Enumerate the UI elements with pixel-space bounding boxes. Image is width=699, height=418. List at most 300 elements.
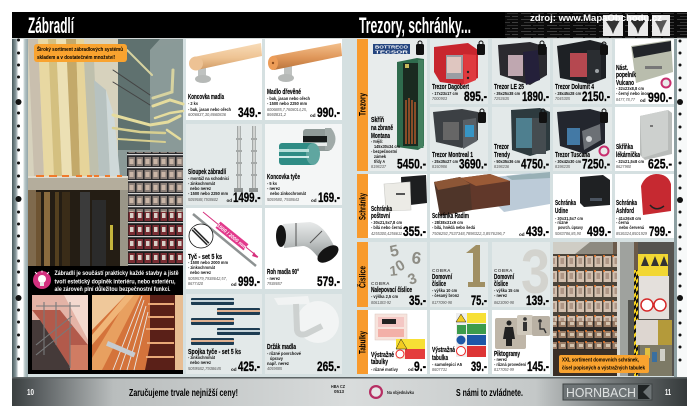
product details: - zinkochromát	[188, 181, 215, 186]
product details	[188, 260, 228, 286]
price: od	[640, 98, 646, 103]
price: od	[311, 198, 317, 203]
product title: Výstražné	[371, 352, 394, 359]
product image: steel numeral 3: 3	[521, 238, 550, 307]
product details: - 5 ks	[267, 181, 277, 186]
product image: stick-on numerals: 3	[406, 270, 419, 289]
product title: Skříňka	[616, 144, 633, 151]
product card: Skříňka lékárnička	[615, 107, 674, 172]
product details: 4059885	[267, 366, 282, 371]
product title: Vulcano	[616, 80, 634, 87]
product card: Držák madla	[265, 294, 342, 374]
product details: - 41x26x8 cm	[616, 216, 641, 221]
product details: - 1500 nebo 2250 mm	[267, 101, 307, 106]
product details: 8627980	[616, 164, 631, 169]
callout: wide range of railing systems	[34, 44, 127, 62]
price: od	[310, 113, 316, 118]
product image: stick-on numerals	[388, 242, 422, 289]
product title: Trezor Dolumit 4	[555, 84, 594, 91]
product card: Nástěnný popelník Vulcano	[615, 39, 674, 105]
price: 169.-	[318, 190, 340, 205]
product details: - černý nebo inox	[616, 91, 649, 96]
section tab: Tabulky: Tabulky	[358, 331, 368, 354]
product details: 5059588,7938602	[188, 197, 218, 202]
product title: Koncovka tyče	[267, 174, 300, 181]
product details: 7045305	[555, 96, 570, 101]
right page header bar	[350, 12, 687, 39]
price: od	[231, 282, 237, 287]
product details: 7000903	[432, 96, 447, 101]
product image: white and black mailboxes	[384, 175, 427, 211]
product card: Trezor Dagobert	[430, 39, 488, 104]
product title: Výstražná	[432, 347, 455, 354]
product image: rod end caps	[279, 128, 336, 165]
product image: first aid cabinet	[640, 110, 672, 160]
icon: weight tag	[600, 42, 608, 55]
product details: - bílá nebo černá	[371, 225, 402, 230]
right footer	[350, 377, 687, 406]
product details: - výška 15 cm	[494, 288, 519, 293]
product details	[188, 355, 222, 371]
brand logo: BOTTRECO	[375, 44, 409, 50]
product title: Montana	[371, 133, 390, 140]
info text: tvoří estetický doplněk interiéru, nebo exteriéru,	[54, 278, 176, 286]
product details	[267, 96, 310, 117]
issue code	[331, 384, 345, 394]
product title	[616, 144, 640, 159]
product title	[616, 200, 637, 215]
panel: black info box with photos	[28, 266, 183, 374]
product image: stick-on numerals: 5	[388, 242, 401, 261]
price: 425.-	[238, 359, 260, 374]
product title: Piktogramy	[494, 351, 520, 358]
price	[231, 359, 260, 374]
product details: - buk, jasan nebo ořech	[267, 96, 310, 101]
info text: Zábradlí je součástí prakticky každé stavby a jistě	[54, 270, 179, 277]
product details	[494, 91, 520, 101]
brand logo: TECSOR	[375, 50, 409, 54]
icon: weight tag	[478, 109, 486, 123]
product title: Domovní	[494, 274, 515, 281]
product details: nebo zinkochromát	[270, 191, 306, 196]
product card: Nalepovací číslice	[368, 242, 427, 308]
product details	[267, 181, 306, 202]
product title: Nást.	[616, 65, 628, 72]
price: 3690.-	[459, 156, 487, 172]
product card: Trezor Trendy	[492, 107, 550, 172]
icon: weight tag	[416, 41, 424, 55]
product image: safety sign sheet	[456, 313, 486, 357]
icon: light bulb	[33, 270, 51, 289]
product image: navy safe	[557, 109, 605, 154]
product details: - 32x21,5x8 cm	[616, 159, 644, 164]
price: 39.-	[471, 359, 487, 374]
product details	[432, 362, 462, 372]
product details: nebo červená	[619, 225, 644, 230]
product details: zámek	[374, 154, 386, 159]
product image: rod with length tag: 1500 / 2000 mm	[215, 223, 248, 251]
price: 999.-	[238, 274, 260, 289]
photo: house numbers and signs store display	[553, 242, 674, 376]
slogan: with us you can do it: S námi to zvládnete.	[456, 387, 523, 399]
price: 139.-	[526, 293, 549, 308]
product title: Trendy	[494, 152, 510, 159]
product image: grey safe	[433, 109, 478, 149]
product title: Schránka	[371, 206, 392, 213]
product details: - 28/38x31x9 cm	[432, 220, 463, 225]
right binder strip	[674, 39, 687, 377]
fittings rack	[127, 152, 183, 212]
icon: weight tag	[477, 41, 485, 55]
callout: wide range of railing systems: Široký sortiment zábradlových systémů	[37, 45, 123, 53]
product details: - 17x23x17 cm	[432, 91, 458, 96]
product card: Výstražná tabulka	[430, 310, 488, 374]
product title: Madlo dřevěné	[267, 89, 301, 96]
product details: - 35x25x38 cm	[494, 91, 520, 96]
page number 11: 11	[665, 388, 671, 397]
product card: Koncovka tyče	[265, 124, 342, 205]
product details	[494, 288, 519, 305]
price: 75.-	[471, 293, 487, 308]
product card: Domovní číslice nerez	[492, 238, 550, 308]
product title: Držák madla	[267, 344, 296, 351]
product title: Tyč - set 5 ks	[188, 254, 222, 261]
product details: 5059580, 7938643	[267, 197, 299, 202]
product details: - 25x35x27 cm	[432, 159, 458, 164]
product details: 4255300,4256611	[371, 231, 402, 236]
product details: 5059582,7938645	[188, 366, 222, 371]
product title: Schránka	[616, 200, 637, 207]
product title: tabulka	[432, 355, 448, 362]
price: 579.-	[317, 274, 340, 289]
product details: - buk, jasan nebo ořech	[188, 107, 231, 112]
product details: - zinkochromát	[188, 265, 215, 270]
product image: railing posts	[234, 126, 258, 192]
product details: - 1500 nebo 2000 mm	[188, 260, 228, 265]
product image: dark teal safe	[511, 108, 550, 156]
product card: Skříň na zbraně Montana	[368, 39, 427, 172]
product details: - nerez	[494, 293, 508, 298]
product details: - 28x45x28 cm	[555, 91, 581, 96]
product details	[616, 86, 649, 102]
product details: - nerez	[267, 186, 281, 191]
product details: - černá	[616, 220, 629, 225]
product details: - bezpečnostní	[371, 149, 398, 154]
product details: - montáž na schodnici	[188, 176, 229, 181]
product details: 7506292,7537348,7898322,3,8576196,7	[432, 231, 506, 236]
product image: dark safe	[498, 42, 547, 85]
product image: stick-on numerals: 0	[392, 257, 408, 275]
price	[640, 90, 672, 105]
product card: Roh madla 90°	[265, 208, 342, 289]
price	[231, 274, 260, 289]
product details: 145x30x34 cm	[374, 144, 400, 149]
issue code: HBA CZ	[331, 384, 345, 389]
product title	[494, 274, 515, 288]
product details: nebo nerez	[190, 360, 212, 365]
product image: wall ashtray	[631, 40, 673, 83]
product details: třídy A	[374, 159, 386, 164]
product details: - různé povrchové	[267, 350, 301, 356]
product details: 5059579,7938642,57,	[188, 276, 227, 281]
product title	[371, 352, 394, 366]
product card: Spojka tyče	[186, 294, 262, 374]
product details: 8177092-99	[494, 367, 514, 372]
brand: Cobra: COBRA	[494, 268, 513, 273]
product details: 8177090-98	[432, 300, 452, 305]
section tab: Číslice	[356, 242, 368, 307]
product details: 8198237	[371, 164, 386, 169]
product details: 8623090-98	[494, 300, 514, 305]
product title: lékárnička	[616, 152, 640, 159]
product title: Schránka	[555, 200, 576, 207]
product card: Koncovka madla	[186, 39, 262, 120]
product title	[432, 274, 453, 288]
price: 499.-	[587, 224, 611, 239]
product title	[494, 144, 510, 159]
product details	[555, 216, 583, 236]
product title: Schránka Radim	[432, 213, 469, 220]
product details: 7938657	[267, 281, 282, 286]
product details: 8198235	[555, 164, 570, 169]
product details: - 30x31,5x7 cm	[555, 216, 583, 221]
product details: - 30x42x30 cm	[555, 159, 581, 164]
product details: 6006885,7,7608014,25,	[267, 107, 307, 112]
price tags on shelf	[36, 175, 122, 177]
product details: 6006837,30,8660836	[188, 112, 227, 117]
price: 5450.-	[397, 156, 426, 172]
price: 895.-	[464, 89, 487, 104]
product title	[432, 347, 455, 362]
product card: Trezor Tuscana	[553, 107, 612, 172]
slogan: lowest prices: Zaručujeme trvale nejnižší ceny!	[129, 387, 238, 399]
product title: Trezor	[494, 144, 509, 151]
product title: poštovní	[371, 213, 391, 220]
product card: Madlo dřevěné	[265, 39, 342, 120]
callout: XXL assortment: čísel popisných a výstražných tabulek	[562, 366, 645, 372]
price: 1890.-	[522, 89, 549, 104]
photo: wooden staircase with handrail	[92, 295, 183, 370]
section tab: Tabulky	[357, 310, 368, 374]
product image: wooden handrail end	[189, 43, 262, 83]
product card: Piktogramy	[492, 310, 550, 374]
icon: weight tag	[600, 109, 608, 123]
section tab: Schránky	[357, 174, 368, 238]
price: od	[519, 232, 525, 237]
product image: red safe	[434, 43, 478, 85]
product details	[494, 357, 527, 372]
product details: - 1500 nebo 2250 mm	[188, 191, 228, 196]
product details	[267, 350, 301, 371]
product card: Schránka Radim	[430, 172, 550, 239]
left page header bar	[12, 12, 350, 39]
product image: black mailbox	[580, 175, 610, 207]
product title: Sloupek zábradlí	[188, 169, 227, 176]
price: 9.-	[414, 359, 426, 374]
product details: - 30x21,5x7,8 cm	[371, 220, 402, 225]
price: 7250.-	[582, 156, 610, 172]
product details: 8677420	[188, 281, 203, 286]
product title: Trezor Dagobert	[432, 84, 469, 91]
product details: - různé motivy	[371, 366, 398, 372]
page number 10: 10	[27, 388, 34, 397]
product details: - různé	[555, 219, 568, 225]
product title: Udine	[555, 208, 568, 215]
section tab: Trezory: Trezory	[358, 93, 368, 116]
product card: Trezor Dolumit 4	[553, 39, 612, 104]
price: od	[408, 367, 414, 372]
section tab: Schránky: Schránky	[358, 193, 368, 220]
product details	[432, 288, 460, 305]
icon: weight tag	[539, 109, 547, 123]
product details: - bílá, hnědá nebo šedá	[432, 225, 475, 230]
price: 799.-	[649, 224, 671, 239]
product details	[188, 176, 229, 202]
icon: clock on-order badge	[660, 78, 672, 88]
price	[519, 224, 549, 239]
price: 625.-	[648, 156, 672, 172]
lower shelf unit	[28, 176, 128, 190]
product details: - výška 2,5 cm	[371, 294, 398, 299]
issue code: 0513	[334, 389, 344, 394]
price	[310, 105, 340, 120]
product title: Ashford	[616, 208, 634, 215]
source watermark: zdroj: www.MapaObchodu.cz	[530, 13, 662, 24]
callout: wide range of railing systems: skladem a v dostatečném množství!	[37, 55, 115, 61]
price: 265.-	[317, 359, 340, 374]
brand logo	[373, 44, 410, 54]
product title: na zbraně	[371, 125, 393, 132]
price: od	[226, 198, 232, 203]
product image: stick-on numerals: 6	[410, 248, 422, 268]
product details: např. nerez	[267, 361, 290, 366]
price: 2150.-	[582, 89, 610, 104]
section tab: Číslice: Číslice	[356, 266, 368, 288]
price: 990.-	[648, 90, 672, 105]
product details: 8198236	[494, 164, 509, 169]
product title: Skříň	[371, 117, 384, 124]
product card: Schránka Ashford	[615, 174, 674, 239]
product title: tabulky	[371, 359, 388, 366]
product title: Trezor Montreal 1	[432, 152, 473, 159]
product title: číslice	[494, 281, 508, 288]
price: 990.-	[317, 105, 340, 120]
heading: Zábradlí: Zábradlí	[28, 13, 74, 38]
product image: black wall safe	[557, 40, 606, 84]
thumbnails in header	[603, 15, 670, 36]
icon: weight tag	[538, 41, 546, 55]
price: 145.-	[527, 359, 549, 374]
note: on order: Na objednávku	[387, 390, 414, 395]
product title: Trezor LE 25	[494, 84, 524, 91]
product details: - Vnější:	[371, 139, 383, 144]
product card: Domovní číslice bronz	[430, 242, 488, 308]
product details: povrch. úpravy	[558, 225, 583, 230]
product details	[432, 159, 458, 169]
product details: - výška 10 cm	[432, 288, 457, 293]
product details: - samolepicí A5	[432, 362, 462, 367]
product details: 8150986	[432, 164, 447, 169]
product details: - česaný bronz	[432, 293, 460, 298]
product title: Domovní	[432, 274, 453, 281]
product title: Roh madla 90°	[267, 268, 299, 276]
product details	[494, 159, 520, 169]
product details: 8061383-92	[371, 300, 391, 305]
product details: úpravy	[270, 356, 283, 361]
product details	[616, 216, 647, 236]
product card: Trezor LE 25	[492, 39, 550, 104]
product details: - 50x35x36 cm	[494, 159, 520, 164]
price: 349.-	[238, 105, 261, 120]
product image: stick-on numerals: 1	[389, 262, 398, 279]
product card: Tyč set 5 ks	[186, 208, 262, 289]
section tab: Trezory	[357, 39, 368, 171]
wall-mounted handrail samples	[113, 50, 183, 142]
product details: - 32x23x8,8 cm	[616, 86, 644, 91]
product details	[371, 139, 400, 169]
product details	[371, 294, 398, 305]
product image: pictogram tiles	[495, 315, 550, 349]
product title: Spojka tyče - set 5 ks	[188, 349, 241, 356]
product image: red mailbox	[641, 174, 671, 215]
product title: popelník	[616, 72, 636, 79]
product card: Schránka Udine	[553, 174, 612, 239]
product image: green gun cabinet	[397, 58, 424, 150]
product card: Výstražné tabulky	[368, 310, 427, 374]
product title: Trezor Tuscana	[555, 152, 590, 159]
product details: 8477,78,77	[616, 97, 635, 102]
product card: Trezor Montreal 1	[430, 107, 488, 172]
product image: elbow joint	[276, 222, 342, 266]
price: od	[231, 367, 237, 372]
info text: ale zároveň plní důležitou bezpečnostní funkci.	[54, 286, 171, 293]
price: 4750.-	[521, 156, 549, 172]
left footer	[12, 377, 350, 406]
photo: steel railing staircase	[32, 295, 88, 370]
price: 35.-	[409, 293, 426, 308]
product title	[371, 117, 393, 140]
price	[311, 190, 340, 205]
price	[226, 190, 260, 205]
info text	[54, 270, 179, 293]
product details	[267, 276, 282, 286]
product image: brown and blue mailboxes	[434, 172, 550, 216]
logo: Hornbach: HORNBACH	[566, 385, 636, 400]
product card: Schránka poštovní	[368, 174, 427, 239]
product image: handrail bracket	[274, 296, 339, 343]
product details	[432, 220, 506, 236]
product image: bronze numeral 1	[466, 245, 485, 287]
product title: Nalepovací číslice	[371, 287, 412, 294]
price: 1499.-	[233, 190, 260, 205]
product details	[432, 91, 458, 101]
product details: - zinkochromát	[188, 355, 215, 360]
product details: nebo nerez	[190, 270, 212, 275]
callout: XXL assortment: XXL sortiment domovních schránek,	[562, 358, 640, 364]
left binder strip	[12, 38, 28, 377]
product details: - různá provedení	[494, 361, 527, 367]
product details: 8536324,8501929	[616, 231, 647, 236]
icon: on-order clock	[369, 385, 383, 399]
product details: nebo nerez	[190, 186, 212, 191]
product title	[555, 200, 576, 215]
product details: - nerez	[267, 276, 281, 281]
product details: 5083786,85,90	[555, 231, 581, 236]
product details: 8660831,2	[267, 112, 287, 117]
product title	[371, 206, 392, 220]
product title: Koncovka madla	[188, 94, 224, 101]
icon: clock on-order badge	[598, 146, 610, 156]
